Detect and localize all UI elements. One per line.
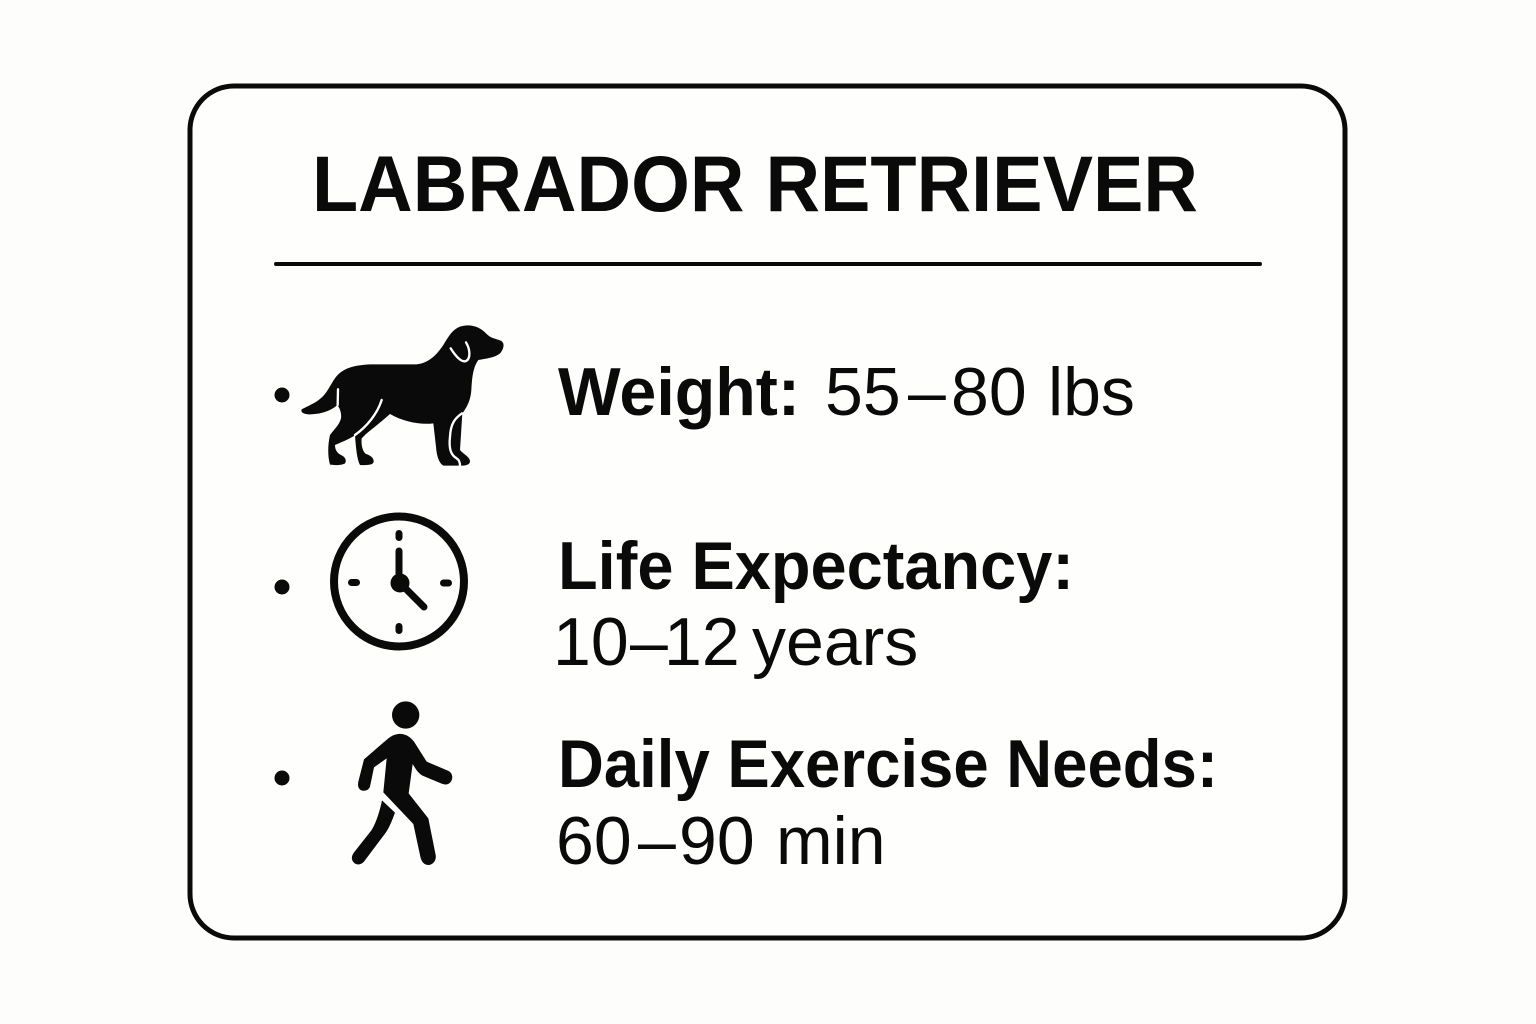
bullet: [274, 770, 290, 786]
weight text: Weight:: [558, 354, 800, 430]
bullet: [274, 388, 290, 402]
icon: dog: [301, 325, 504, 466]
daily exercise value: –: [638, 803, 676, 879]
title: LABRADOR RETRIEVER: [312, 139, 1198, 228]
daily exercise text: Daily Exercise Needs:: [558, 726, 1218, 802]
weight value: 55: [825, 354, 901, 430]
life expectancy value: 10: [553, 604, 629, 680]
icon: walking person: [352, 701, 452, 865]
weight value: –: [908, 354, 946, 430]
daily exercise value: min: [776, 803, 886, 879]
life expectancy value: years: [752, 604, 918, 680]
life expectancy text: Life Expectancy:: [558, 528, 1074, 604]
life expectancy value: –: [630, 604, 668, 680]
row: life expectancy: [274, 516, 1074, 680]
icon: clock: [334, 516, 464, 646]
row: weight: [274, 325, 1135, 466]
life expectancy value: 12: [664, 604, 759, 680]
weight value: 80: [951, 354, 1046, 430]
daily exercise value: 90: [679, 803, 774, 879]
bullet: [274, 580, 290, 594]
daily exercise value: 60: [556, 803, 632, 879]
weight value: lbs: [1048, 354, 1135, 430]
panel: card: [190, 86, 1345, 938]
row: daily exercise: [274, 701, 1218, 879]
